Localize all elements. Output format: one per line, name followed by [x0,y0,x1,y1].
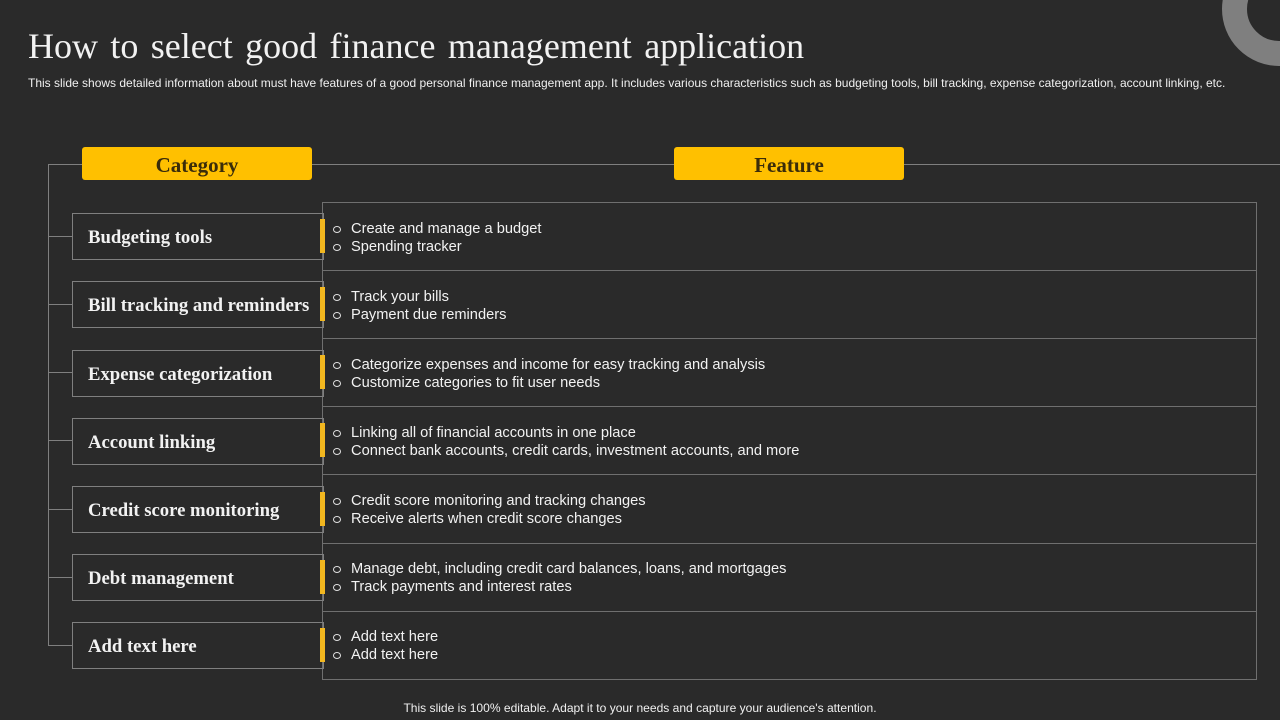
row 5 marker [320,492,325,526]
row 3 features: Customize categories to fit user needs [351,375,600,391]
row 2 marker [320,287,325,321]
row 2 category [72,281,324,328]
row 4 features [333,425,799,459]
row 3 features [333,357,765,391]
heading: Category [82,147,312,180]
row 2 features [333,289,506,323]
row 5 features [333,493,646,527]
row 6 features: Manage debt, including credit card balances, loans, and mortgages [351,561,786,577]
row 5 features: Receive alerts when credit score changes [351,511,622,527]
row 2 features: Payment due reminders [351,307,506,323]
heading: Feature: Feature [754,153,824,177]
row 7 features [333,629,438,663]
row 1 features: Create and manage a budget [351,221,541,237]
row 4 category: Account linking [88,432,215,453]
row 6 category [72,554,324,601]
footer note: This slide is 100% editable. Adapt it to your needs and capture your audience's attention. [403,701,877,715]
row 7 category [72,622,324,669]
row 4 features: Linking all of financial accounts in one place [351,425,636,441]
row 3 features: Categorize expenses and income for easy tracking and analysis [351,357,765,373]
row 2 features: Track your bills [351,289,449,305]
row 6 features: Track payments and interest rates [351,579,572,595]
row 5 category [72,486,324,533]
row 2 category: Bill tracking and reminders [88,295,309,316]
row 4 features: Connect bank accounts, credit cards, investment accounts, and more [351,443,799,459]
row 7 marker [320,628,325,662]
row 1 features: Spending tracker [351,239,462,255]
row 1 category [72,213,324,260]
panel: feature rows [322,202,1257,680]
row 3 category [72,350,324,397]
row 7 features: Add text here [351,647,438,663]
heading: Feature [674,147,904,180]
row 7 category: Add text here [88,636,197,657]
decorative ring [1222,0,1280,66]
subtitle: This slide shows detailed information about must have features of a good personal finance management app. It includes various characteristics such as budgeting tools, bill tracking, expense categorization, account linking, etc. [28,76,1225,90]
row 1 features [333,221,542,255]
row 3 category: Expense categorization [88,364,272,385]
row 6 features [333,561,786,595]
row 5 category: Credit score monitoring [88,500,279,521]
row 4 marker [320,423,325,457]
row 6 category: Debt management [88,568,234,589]
title: How to select good finance management application [28,26,804,66]
row 1 category: Budgeting tools [88,227,212,248]
heading: Category: Category [156,153,238,177]
row 6 marker [320,560,325,594]
row 5 features: Credit score monitoring and tracking changes [351,493,646,509]
row 3 marker [320,355,325,389]
row 4 category [72,418,324,465]
row 1 marker [320,219,325,253]
row 7 features: Add text here [351,629,438,645]
